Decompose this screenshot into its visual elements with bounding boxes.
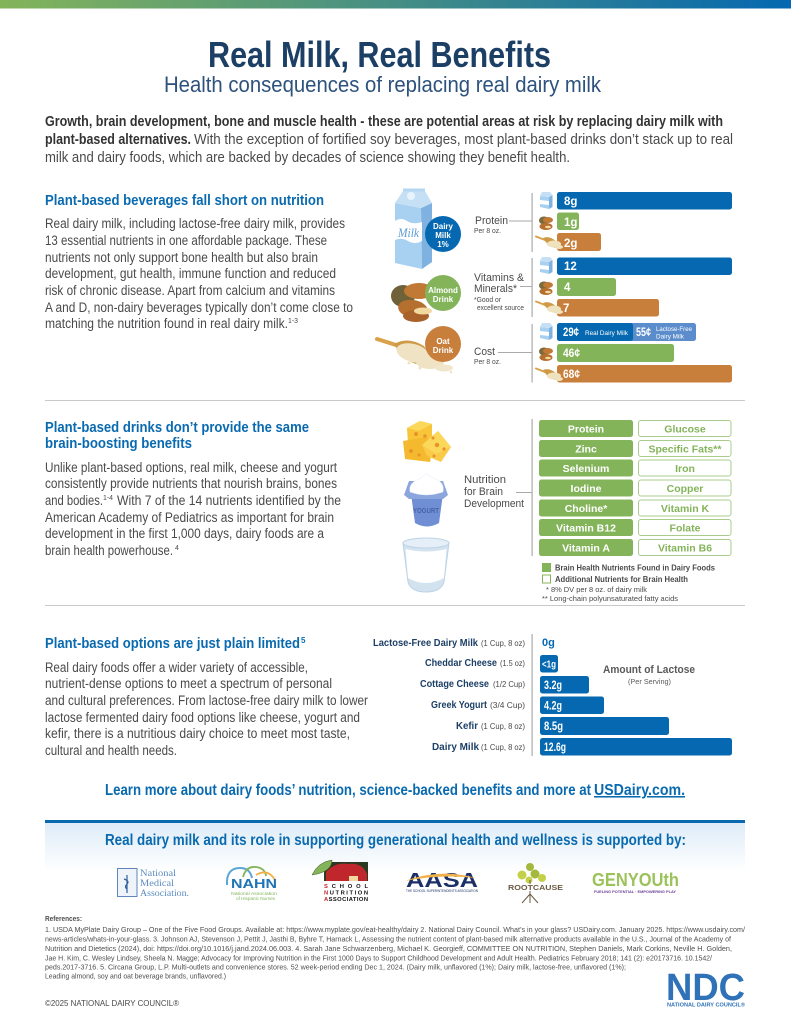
- illustration: yogurt cup: [404, 473, 448, 526]
- panel: nutrients found in dairy foods: Vitamin A: [562, 542, 610, 554]
- section 1 body text: Real dairy milk, including lactose-free dairy milk, provides: [45, 216, 345, 231]
- top gradient bar: [0, 0, 791, 8]
- panel: additional nutrients for brain health: Iron: [675, 463, 695, 475]
- panel: additional nutrients for brain health: Copper: [667, 483, 703, 495]
- title: Real Milk, Real Benefits: [208, 34, 551, 75]
- section 2 body text: development in the first 1,000 days, dairy foods are a: [45, 526, 324, 541]
- section 2 body text: American Academy of Pediatrics as important for brain: [45, 510, 334, 525]
- cost comparison chart: 68¢: [563, 369, 581, 381]
- logo: National Medical Association: National: [140, 869, 176, 879]
- lactose chart: 3.2g: [544, 680, 562, 692]
- nutrition for brain development label: Development: [464, 498, 524, 510]
- illustration: milk carton with label: Milk: [397, 225, 419, 240]
- panel: nutrients found in dairy foods: Iodine: [571, 483, 602, 495]
- section 1 body text: A and D, non-dairy beverages typically don’t come close to: [45, 300, 353, 315]
- section 3 body text: Real dairy foods offer a wider variety of accessible,: [45, 660, 308, 675]
- section 1 body text: matching the nutrition found in real dairy milk.: [45, 316, 288, 331]
- cost comparison chart: Dairy Milk: [656, 334, 685, 340]
- lactose chart title: Amount of Lactose: [603, 664, 695, 676]
- panel: additional nutrients for brain health: Vitamin K: [661, 503, 710, 515]
- section 2 body text: 4: [175, 545, 179, 552]
- lactose chart: 12.6g: [544, 742, 566, 754]
- logo: GENYOUth: GENYOUth: [592, 870, 679, 890]
- cost comparison chart: 46¢: [563, 348, 581, 360]
- lactose chart: (1/2 Cup): [493, 679, 525, 689]
- nutrition for brain development label: for Brain: [464, 486, 503, 498]
- cost comparison chart: Real Dairy Milk: [585, 330, 629, 337]
- vitamins and minerals comparison chart: *Good or: [474, 295, 501, 304]
- illustration: oats scoop with label: Drink: [433, 346, 454, 355]
- lactose chart: (1.5 oz): [500, 658, 525, 668]
- section 1 body text: development, gut health, immune function and reduced: [45, 266, 336, 281]
- subtitle: Health consequences of replacing real dairy milk: [164, 72, 602, 97]
- protein comparison chart: Protein: [475, 215, 508, 227]
- illustration: milk carton with label: Dairy: [433, 222, 454, 231]
- section 2 body text: consistently provide nutrients that nourish brains, bones: [45, 476, 337, 491]
- illustration: oats scoop with label: Oat: [436, 337, 450, 346]
- call to action: Learn more about dairy foods’ nutrition, science-backed benefits and more at: [105, 782, 591, 799]
- illustration: yogurt cup: YOGURT: [413, 508, 440, 515]
- logo: AASA: AASA: [406, 870, 478, 892]
- intro paragraph: milk and dairy foods, which are backed by decades of science showing they benefit health.: [45, 150, 570, 166]
- lactose chart: Cheddar Cheese: [425, 657, 497, 669]
- protein comparison chart: 2g: [564, 238, 577, 250]
- nutrient legend and footnotes: Additional Nutrients for Brain Health: [555, 574, 688, 584]
- logo: National Dairy Council: NATIONAL DAIRY COUNCIL®: [667, 1002, 745, 1008]
- logo: National Medical Association: Medical: [140, 879, 174, 889]
- section 2 body text: With 7 of the 14 nutrients identified by the: [117, 493, 341, 508]
- logo: School Nutrition Association: N UTRITION: [324, 890, 368, 896]
- vitamins and minerals comparison chart: 4: [564, 282, 571, 294]
- nutrition for brain development label: [464, 419, 533, 556]
- logo: The Root Cause Coalition: ROOTCAUSE: [508, 885, 563, 892]
- lactose chart title: (Per Serving): [628, 677, 671, 686]
- illustration: almonds with label: Almond: [428, 286, 458, 295]
- vitamins and minerals comparison chart: [474, 257, 732, 317]
- intro paragraph: plant-based alternatives.: [45, 132, 191, 148]
- illustration: glass of milk: [403, 538, 449, 592]
- nutrition for brain development label: Nutrition: [464, 474, 506, 486]
- cost comparison chart: Cost: [474, 346, 495, 358]
- intro paragraph: With the exception of fortified soy beverages, most plant-based drinks don’t stack up to real: [194, 132, 733, 148]
- section 1 body text: risk of chronic disease. Apart from calcium and vitamins: [45, 283, 335, 298]
- panel: nutrients found in dairy foods: Protein: [568, 424, 604, 436]
- copyright: ©2025 NATIONAL DAIRY COUNCIL®: [45, 998, 180, 1008]
- nutrient legend and footnotes: ** Long-chain polyunsaturated fatty acids: [542, 594, 678, 603]
- nutrient legend and footnotes: * 8% DV per 8 oz. of dairy milk: [546, 585, 647, 594]
- intro paragraph: [45, 114, 733, 166]
- section 2 body text: and bodies.: [45, 493, 103, 508]
- references: [45, 914, 746, 980]
- section 1 heading: Plant-based beverages fall short on nutrition: [45, 193, 324, 209]
- references: news-articles/whats-in-your-glass. 3. Johnson AJ, Stevenson J, Pettit J, Jasthi B, Byhre T, Harnack L, Assessing the nutrient content of plant-based milk alternative products available in the U.S., Journal of the Academy of: [45, 934, 732, 944]
- references: References:: [45, 914, 82, 923]
- logo: School Nutrition Association: [312, 860, 368, 903]
- section 1 body text: 13 essential nutrients in one affordable package. These: [45, 233, 327, 248]
- protein comparison chart: 1g: [564, 217, 577, 229]
- section 1 body text: nutrients not only support bone health but also brain: [45, 250, 318, 265]
- illustration: oats scoop with label: [377, 326, 461, 373]
- vitamins and minerals comparison chart: Minerals*: [474, 283, 518, 295]
- lactose chart: (3/4 Cup): [490, 700, 525, 710]
- lactose chart: 8.5g: [544, 721, 563, 733]
- illustration: cheese: [403, 421, 451, 462]
- panel: additional nutrients for brain health: Vitamin B6: [658, 542, 712, 554]
- illustration: milk carton with label: Milk: [435, 231, 451, 240]
- section 3 body text: [45, 660, 368, 758]
- logo: NAHN: of Hispanic Nurses: [236, 896, 276, 901]
- section 3 heading: 5: [301, 636, 306, 645]
- logo: NAHN: National Association: [231, 891, 278, 896]
- lactose chart: <1g: [542, 658, 556, 670]
- logo: NAHN: NAHN: [231, 876, 277, 891]
- illustration: milk carton with label: 1%: [437, 240, 449, 249]
- lactose chart: Dairy Milk: [432, 741, 479, 753]
- nutrient legend and footnotes: [542, 562, 715, 603]
- logo: NAHN: [227, 867, 278, 901]
- panel: additional nutrients for brain health: [638, 420, 731, 556]
- logo: National Dairy Council: NDC: [666, 967, 745, 1009]
- section 2 body text: Unlike plant-based options, real milk, cheese and yogurt: [45, 460, 337, 475]
- panel: nutrients found in dairy foods: Selenium: [563, 463, 609, 475]
- section 3 heading: Plant-based options are just plain limited: [45, 636, 300, 652]
- section 3 body text: kefir, there is a nutritious dairy choice to meet most taste,: [45, 726, 350, 741]
- panel: additional nutrients for brain health: Glucose: [664, 424, 706, 436]
- cost comparison chart: [474, 323, 732, 382]
- illustration: almonds with label: [391, 275, 461, 322]
- lactose chart: (1 Cup, 8 oz): [481, 638, 525, 648]
- panel: nutrients found in dairy foods: [539, 420, 633, 556]
- section 3 body text: nutrient-dense options to meet a spectrum of personal: [45, 676, 332, 691]
- section 2 body text: [45, 460, 341, 558]
- illustration: almonds with label: Drink: [433, 295, 454, 304]
- call to action: USDairy.com.: [594, 782, 685, 799]
- references: 1. USDA MyPlate Dairy Group – One of the Five Food Groups. Available at: https://www.myplate.gov/eat-healthy/dairy 2. National Dairy Council. What’s in your glass? USDairy.com. January 2025. https://www.usdairy.com/: [45, 925, 746, 934]
- references: Leading almond, soy and oat beverage brands, unflavored.): [45, 972, 226, 980]
- section 2 heading: [45, 420, 309, 452]
- logo: National Medical Association: [118, 868, 189, 899]
- cost comparison chart: 29¢: [563, 327, 580, 339]
- protein comparison chart: Per 8 oz.: [474, 226, 501, 235]
- logo: School Nutrition Association: S CHOOL: [324, 884, 368, 890]
- vitamins and minerals comparison chart: excellent source: [477, 303, 524, 312]
- panel: nutrients found in dairy foods: Zinc: [575, 444, 597, 456]
- lactose chart: Kefir: [456, 720, 478, 732]
- section 3 body text: lactose fermented dairy food options like cheese, yogurt and: [45, 710, 360, 725]
- section 1 body text: [45, 216, 353, 331]
- protein comparison chart: 8g: [564, 196, 577, 208]
- vitamins and minerals comparison chart: Vitamins &: [474, 272, 525, 284]
- lactose chart title: [603, 664, 695, 686]
- panel: supporters: [45, 820, 745, 903]
- vitamins and minerals comparison chart: 12: [564, 261, 577, 273]
- logo: GENYOUth: FUELING POTENTIAL · EMPOWERING PLAY: [594, 890, 676, 894]
- section 3 body text: cultural and health needs.: [45, 743, 177, 758]
- lactose chart: Greek Yogurt: [431, 699, 487, 711]
- cost comparison chart: 55¢: [636, 327, 651, 339]
- panel: additional nutrients for brain health: Specific Fats**: [649, 444, 722, 456]
- lactose chart: 0g: [542, 637, 555, 649]
- references: Jae H. Kim, C. Wesley Lindsey, Sheela N. Magge; Advocacy for Improving Nutrition in the First 1000 Days to Support Childhood Development and Adult Health. Pediatrics February 2018; 141 (2): e20173716. 10.1542/: [45, 954, 713, 962]
- supporters heading: Real dairy milk and its role in supporting generational health and wellness is supported by:: [105, 832, 686, 849]
- logo: National Medical Association: Association.: [140, 889, 189, 899]
- lactose chart: 4.2g: [544, 700, 562, 712]
- logo: AASA: THE SCHOOL SUPERINTENDENTS ASSOCIATION: [406, 889, 478, 893]
- vitamins and minerals comparison chart: 7: [563, 303, 569, 315]
- section 2 body text: brain health powerhouse.: [45, 543, 173, 558]
- cost comparison chart: Per 8 oz.: [474, 357, 501, 366]
- section 2 body text: 1-4: [103, 495, 113, 502]
- lactose chart: (1 Cup, 8 oz): [481, 721, 525, 731]
- protein comparison chart: [474, 192, 732, 252]
- section 2 heading: Plant-based drinks don’t provide the same: [45, 420, 309, 436]
- lactose chart: [373, 634, 732, 756]
- logo: The Root Cause Coalition: [508, 863, 563, 903]
- references: peds.2017-3716. 5. Circana Group, L.P. Multi-outlets and convenience stores. 52 week-period ending Dec 1, 2024. (Dairy milk, unflavored (1%); Dairy milk, lactose-free, unflavored (1%);: [45, 962, 626, 972]
- illustration: milk carton with label: [395, 188, 461, 269]
- logo: School Nutrition Association: ASSOCIATION: [324, 897, 368, 903]
- lactose chart: (1 Cup, 8 oz): [481, 742, 525, 752]
- lactose chart: Lactose-Free Dairy Milk: [373, 637, 478, 649]
- cost comparison chart: Lactose-Free: [656, 326, 692, 333]
- references: Nutrition and Dietetics (2024), doi: https://doi.org/10.1016/j.jand.2024.06.003. 4. Sarah Jane Schwarzenberg, Michael K. Georgieff, COMMITTEE ON NUTRITION, Stephen Daniels, Mark Corkins, Neville H. Golden,: [45, 944, 732, 953]
- section 1 body text: 1-3: [288, 318, 298, 325]
- panel: nutrients found in dairy foods: Vitamin B12: [556, 522, 616, 534]
- lactose chart: Cottage Cheese: [420, 678, 489, 690]
- nutrient legend and footnotes: Brain Health Nutrients Found in Dairy Foods: [555, 562, 715, 572]
- panel: additional nutrients for brain health: Folate: [670, 522, 701, 534]
- section 3 body text: and cultural preferences. From lactose-free dairy milk to lower: [45, 693, 368, 708]
- panel: nutrients found in dairy foods: Choline*: [565, 503, 608, 515]
- section 2 heading: brain-boosting benefits: [45, 436, 192, 452]
